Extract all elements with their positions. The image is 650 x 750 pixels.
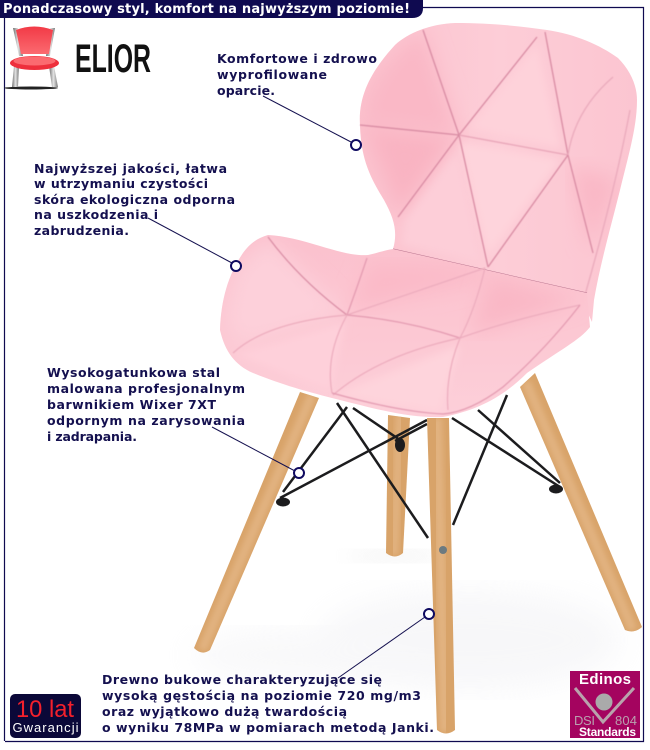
callout 3 text bbox=[47, 365, 245, 444]
callout 2 text: skóra ekologiczna odporna bbox=[34, 192, 235, 207]
callout 4 pointer bbox=[338, 609, 434, 678]
callout 2 text: w utrzymaniu czystości bbox=[34, 176, 208, 191]
warranty badge bbox=[10, 694, 81, 738]
callout 4 text: Drewno bukowe charakteryzujące się bbox=[102, 672, 382, 687]
callout 2 text: na uszkodzenia i bbox=[34, 207, 158, 222]
front leg bbox=[427, 418, 455, 734]
callout 2 text: zabrudzenia. bbox=[34, 223, 129, 238]
callout 4 text: o wyniku 78MPa w pomiarach metodą Janki. bbox=[102, 720, 434, 735]
callout 1 text bbox=[217, 51, 377, 98]
callout 3 pointer bbox=[212, 427, 304, 478]
callout 1 text: Komfortowe i zdrowo bbox=[217, 51, 377, 66]
title bar: Ponadczasowy styl, komfort na najwyższym poziomie! bbox=[3, 2, 410, 17]
callout 1 pointer bbox=[263, 96, 361, 150]
chair seat bbox=[220, 235, 590, 418]
callout 2 text: Najwyższej jakości, łatwa bbox=[34, 161, 227, 176]
back leg bbox=[386, 415, 410, 556]
callout 2 pointer bbox=[148, 218, 241, 271]
callout 2 text bbox=[34, 161, 235, 238]
callout 3 text: malowana profesjonalnym bbox=[47, 381, 245, 396]
Edinos certificate badge bbox=[570, 671, 640, 739]
right leg bbox=[515, 370, 645, 635]
floor shadow bbox=[190, 550, 620, 690]
callout 4 text: wysoką gęstością na poziomie 720 mg/m3 bbox=[102, 688, 421, 703]
Edinos certificate badge: 804 bbox=[615, 713, 637, 728]
callout 3 text: Wysokogatunkowa stal bbox=[47, 365, 220, 380]
Edinos certificate badge: Standards bbox=[579, 725, 636, 739]
rod feet bbox=[276, 438, 563, 506]
chair backrest bbox=[360, 23, 637, 322]
callout 4 text: oraz wyjątkowo dużą twardością bbox=[102, 704, 347, 719]
warranty badge: Gwarancji bbox=[12, 720, 79, 735]
leg bolt bbox=[439, 546, 447, 554]
logo: chair icon bbox=[4, 26, 59, 90]
callout 4 text bbox=[102, 672, 434, 735]
warranty badge: 10 lat bbox=[16, 696, 74, 723]
left leg bbox=[194, 392, 319, 653]
callout 3 text: barwnikiem Wixer 7XT bbox=[47, 397, 216, 412]
logo: wordmark: ELIOR bbox=[75, 37, 151, 81]
Edinos certificate badge: DSI bbox=[574, 713, 595, 728]
callout 1 text: oparcie. bbox=[217, 83, 275, 98]
callout 3 text: odpornym na zarysowania bbox=[47, 413, 245, 428]
Edinos certificate badge: Edinos bbox=[579, 671, 631, 688]
metal base rods bbox=[280, 395, 560, 538]
callout 1 text: wyprofilowane bbox=[217, 67, 327, 82]
callout 3 text: i zadrapania. bbox=[47, 429, 137, 444]
